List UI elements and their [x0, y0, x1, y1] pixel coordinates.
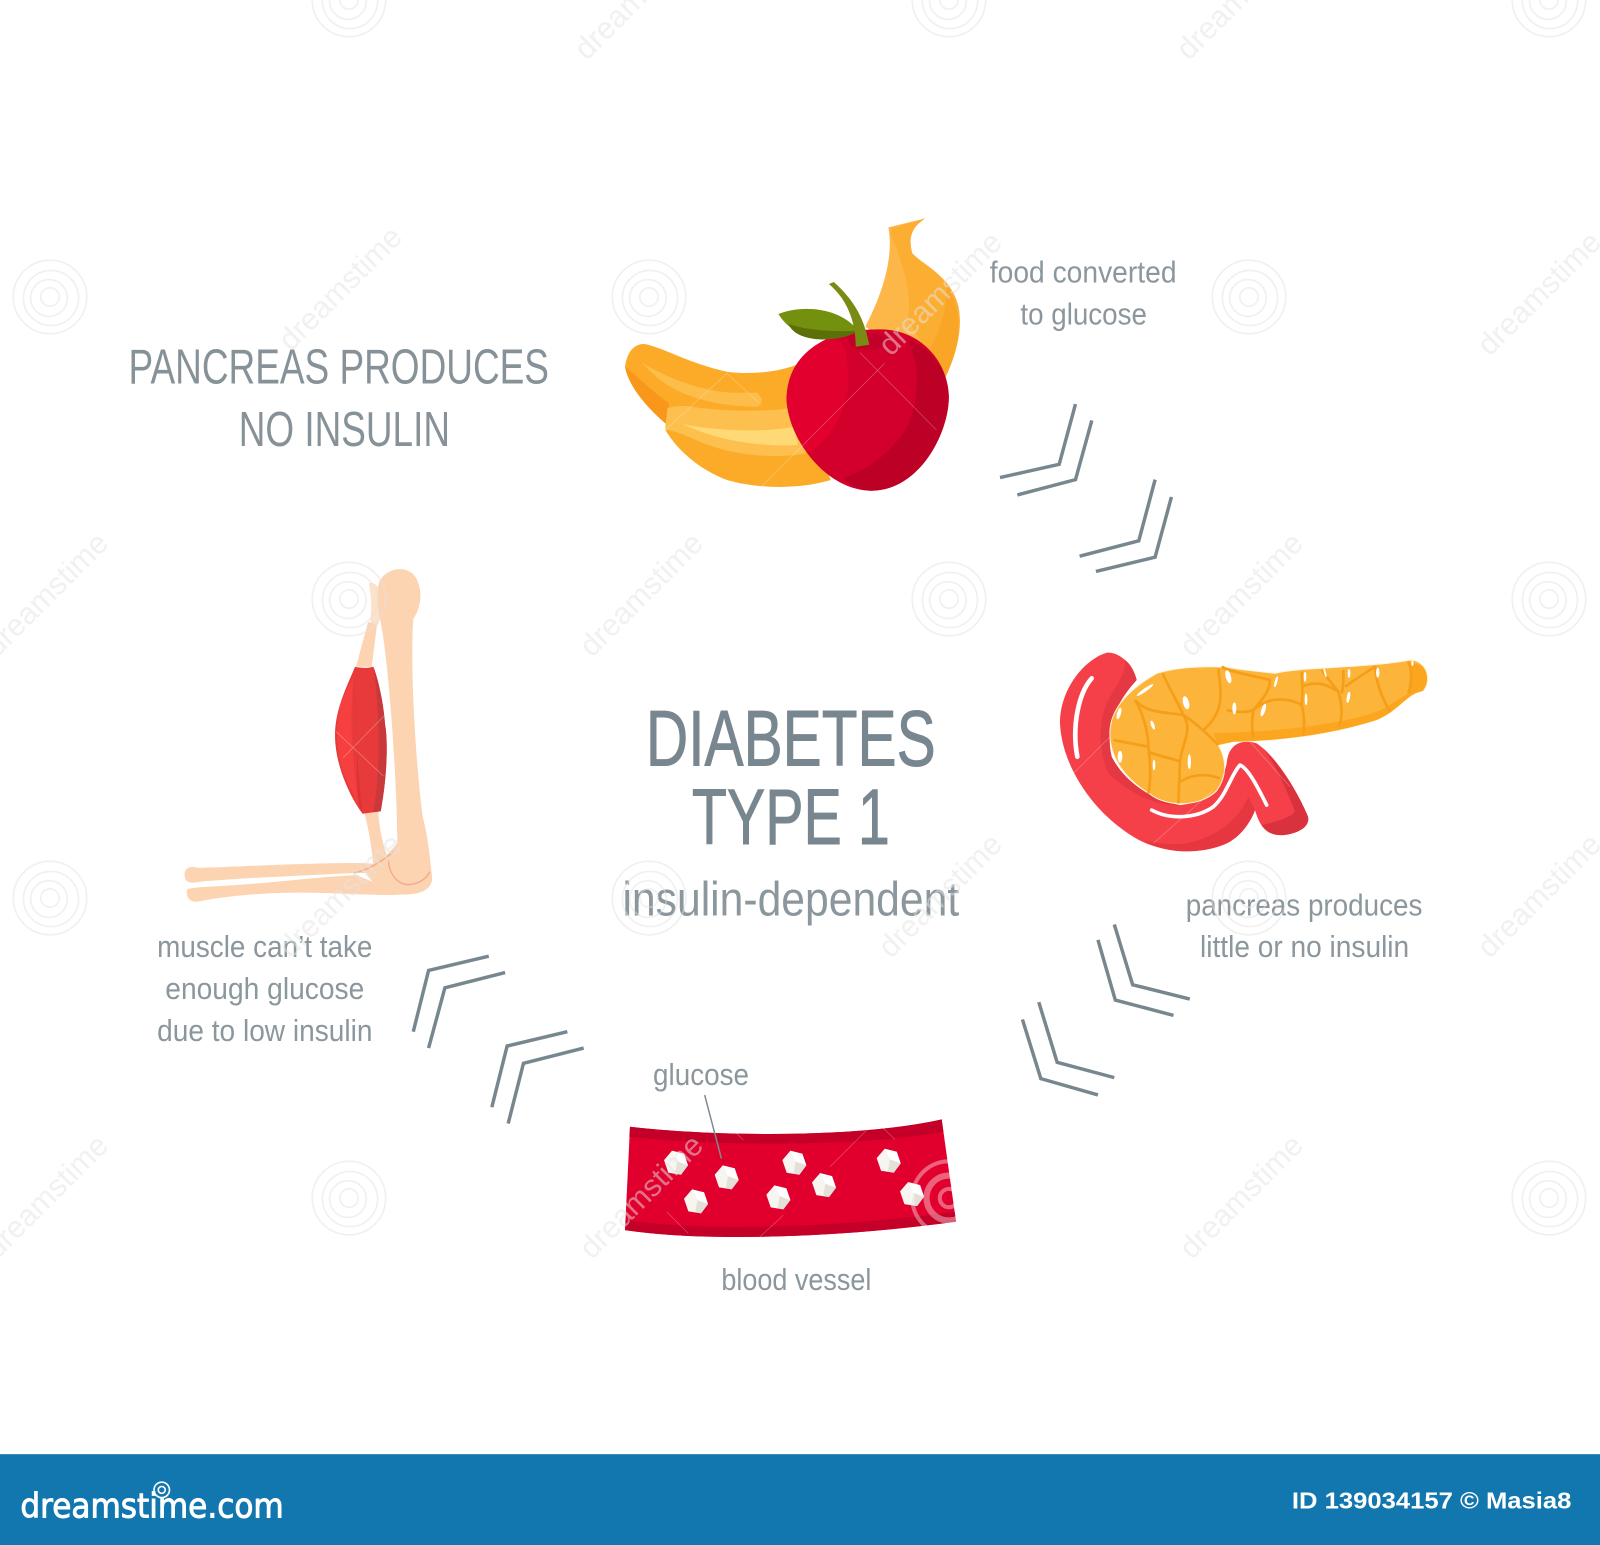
watermark spirals and logotype: dreamstime [1173, 1128, 1310, 1265]
heading: pancreas produces no insulin [129, 341, 549, 457]
glucose pointer line [705, 1095, 721, 1158]
chevrons: food to pancreas [1000, 404, 1171, 571]
icon: blood vessel with glucose [625, 1095, 956, 1237]
icon: arm bones and muscle [185, 569, 432, 902]
watermark spirals and logotype: dreamstime [872, 827, 1009, 964]
joint lines [353, 852, 430, 885]
footer logo: dreamstime.com: dreamstime.com [20, 1486, 284, 1525]
watermark lines on vessel [667, 1127, 895, 1237]
pancreas body [1110, 660, 1428, 804]
title: diabetes type 1 [646, 694, 936, 861]
icon: logo spiral [154, 1482, 169, 1498]
watermark spirals and logotype: dreamstime [573, 526, 710, 663]
watermark spirals and logotype: dreamstime [872, 225, 1009, 362]
front upper banana [625, 344, 815, 427]
label: food converted to glucose: food converted [990, 256, 1177, 290]
title: diabetes type 1: DIABETES [646, 694, 936, 782]
leaf [778, 309, 858, 340]
forearm bones [185, 863, 403, 902]
label: pancreas produces little or no insulin: little or no insulin [1200, 930, 1409, 964]
footer banner [0, 1454, 1600, 1545]
front lower banana [665, 406, 831, 487]
label: food converted to glucose: to glucose [1020, 298, 1147, 332]
icon: banana and apple [625, 218, 960, 491]
label: muscle can't take enough glucose: muscle can’t take [157, 930, 372, 964]
vessel wall [625, 1119, 956, 1237]
vessel watermark overlay [912, 1161, 986, 1235]
subtitle: insulin-dependent: insulin-dependent [622, 873, 959, 926]
watermark spirals and logotype: dreamstime [272, 220, 409, 357]
title: diabetes type 1: TYPE 1 [692, 773, 890, 861]
label: muscle can't take enough glucose: enough glucose [165, 972, 364, 1006]
label: muscle can't take enough glucose: due to low insulin [157, 1014, 372, 1048]
footer credit: ID 139034157 © Masia8 [1292, 1487, 1571, 1513]
label: muscle can't take enough glucose [157, 930, 372, 1048]
tendons [356, 583, 390, 865]
label: food converted to glucose [990, 256, 1177, 332]
label: blood vessel: blood vessel [721, 1263, 871, 1297]
label: pancreas produces little or no insulin [1186, 888, 1422, 964]
label: glucose: glucose [653, 1058, 749, 1092]
stem [829, 282, 869, 347]
humerus and elbow [367, 569, 432, 895]
muscle [335, 667, 387, 814]
duodenum [1060, 653, 1308, 851]
chevrons: blood vessel to muscle [413, 956, 584, 1124]
vessel dark bands [625, 1119, 956, 1237]
icon: pancreas and duodenum [1060, 653, 1428, 851]
apple body [787, 329, 949, 491]
chevrons: pancreas to blood vessel [1022, 925, 1190, 1095]
label: pancreas produces little or no insulin: pancreas produces [1186, 888, 1422, 922]
watermark spirals and logotype: dreamstime [1173, 526, 1310, 663]
back banana [865, 218, 960, 380]
watermark lines on pancreas [1070, 737, 1290, 843]
glucose cubes [664, 1149, 924, 1213]
watermark lines on fruit [665, 353, 937, 487]
heading: pancreas produces no insulin: PANCREAS PRODUCES [129, 341, 549, 395]
watermark spirals and logotype: dreamstime [272, 827, 409, 964]
heading: pancreas produces no insulin: NO INSULIN [239, 403, 450, 457]
watermark spirals and logotype: dreamstime [573, 1128, 710, 1265]
